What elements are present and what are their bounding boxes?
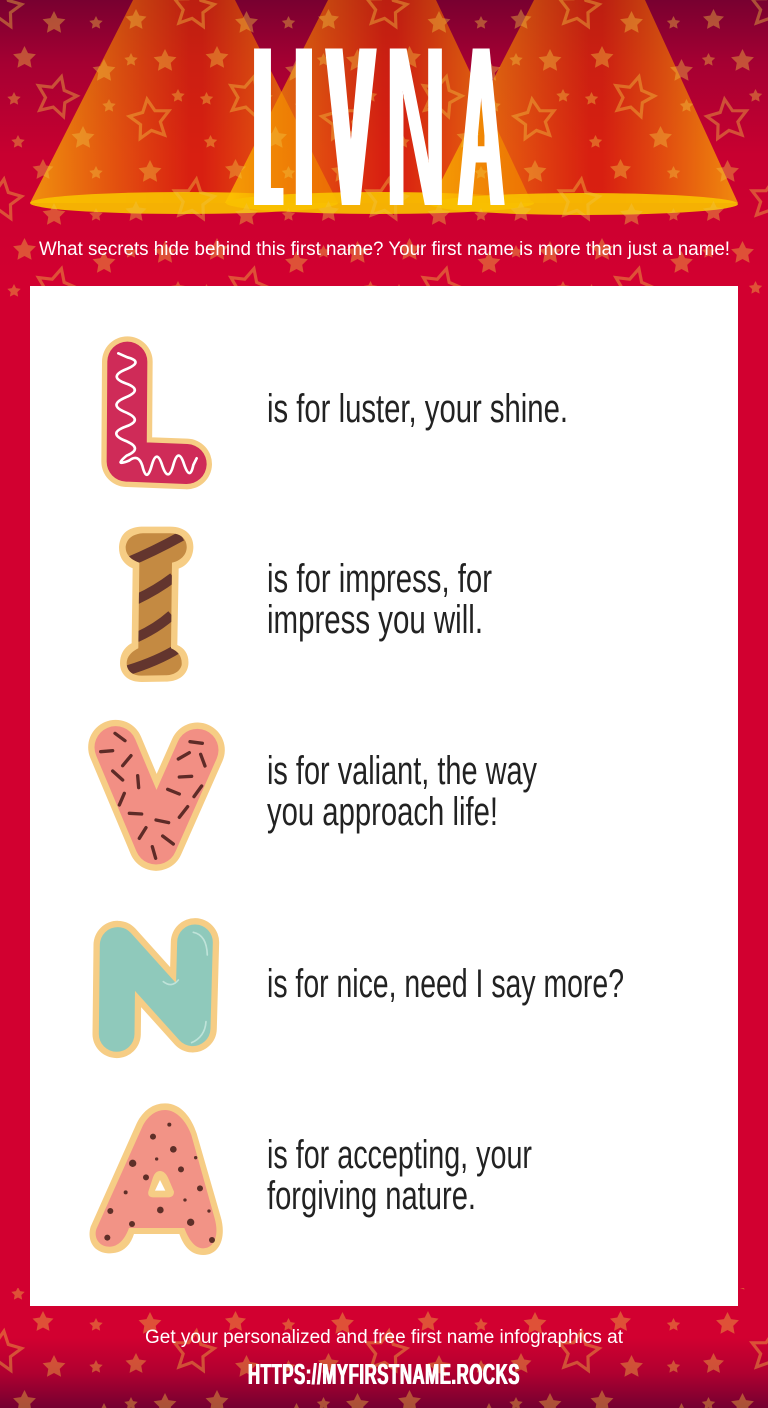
text I: impress you will. — [267, 598, 483, 642]
spotlight left — [30, 0, 338, 214]
star pattern top — [0, 0, 768, 300]
cookie letter L — [116, 353, 197, 475]
cookie letter V — [101, 733, 205, 858]
text N: is for nice, need I say more? — [267, 962, 624, 1006]
subtitle: What secrets hide behind this first name? Your first name is more than just a name! — [39, 239, 730, 260]
white panel — [30, 286, 738, 1306]
footer url: HTTPS://MYFIRSTNAME.ROCKS — [248, 1359, 520, 1391]
text I — [267, 557, 492, 642]
text A: forgiving nature. — [267, 1174, 476, 1218]
cookie letter N — [117, 932, 207, 1043]
title letter I: I — [296, 0, 312, 262]
text V: you approach life! — [267, 790, 498, 834]
spotlight centre — [225, 0, 534, 214]
text V — [267, 749, 537, 834]
title letter N: N — [386, 0, 446, 262]
text I: is for impress, for — [267, 557, 492, 601]
cookie letter I — [119, 527, 193, 682]
cookie letter A — [90, 1103, 223, 1255]
text L: is for luster, your shine. — [267, 387, 568, 431]
title — [258, 0, 504, 262]
star pattern bottom — [0, 1288, 768, 1408]
spotlight right — [430, 0, 738, 215]
text A: is for accepting, your — [267, 1133, 532, 1177]
spotlights — [30, 0, 738, 215]
text A — [267, 1133, 532, 1218]
text V: is for valiant, the way — [267, 749, 537, 793]
footer invitation: Get your personalized and free first name infographics at — [145, 1327, 624, 1348]
